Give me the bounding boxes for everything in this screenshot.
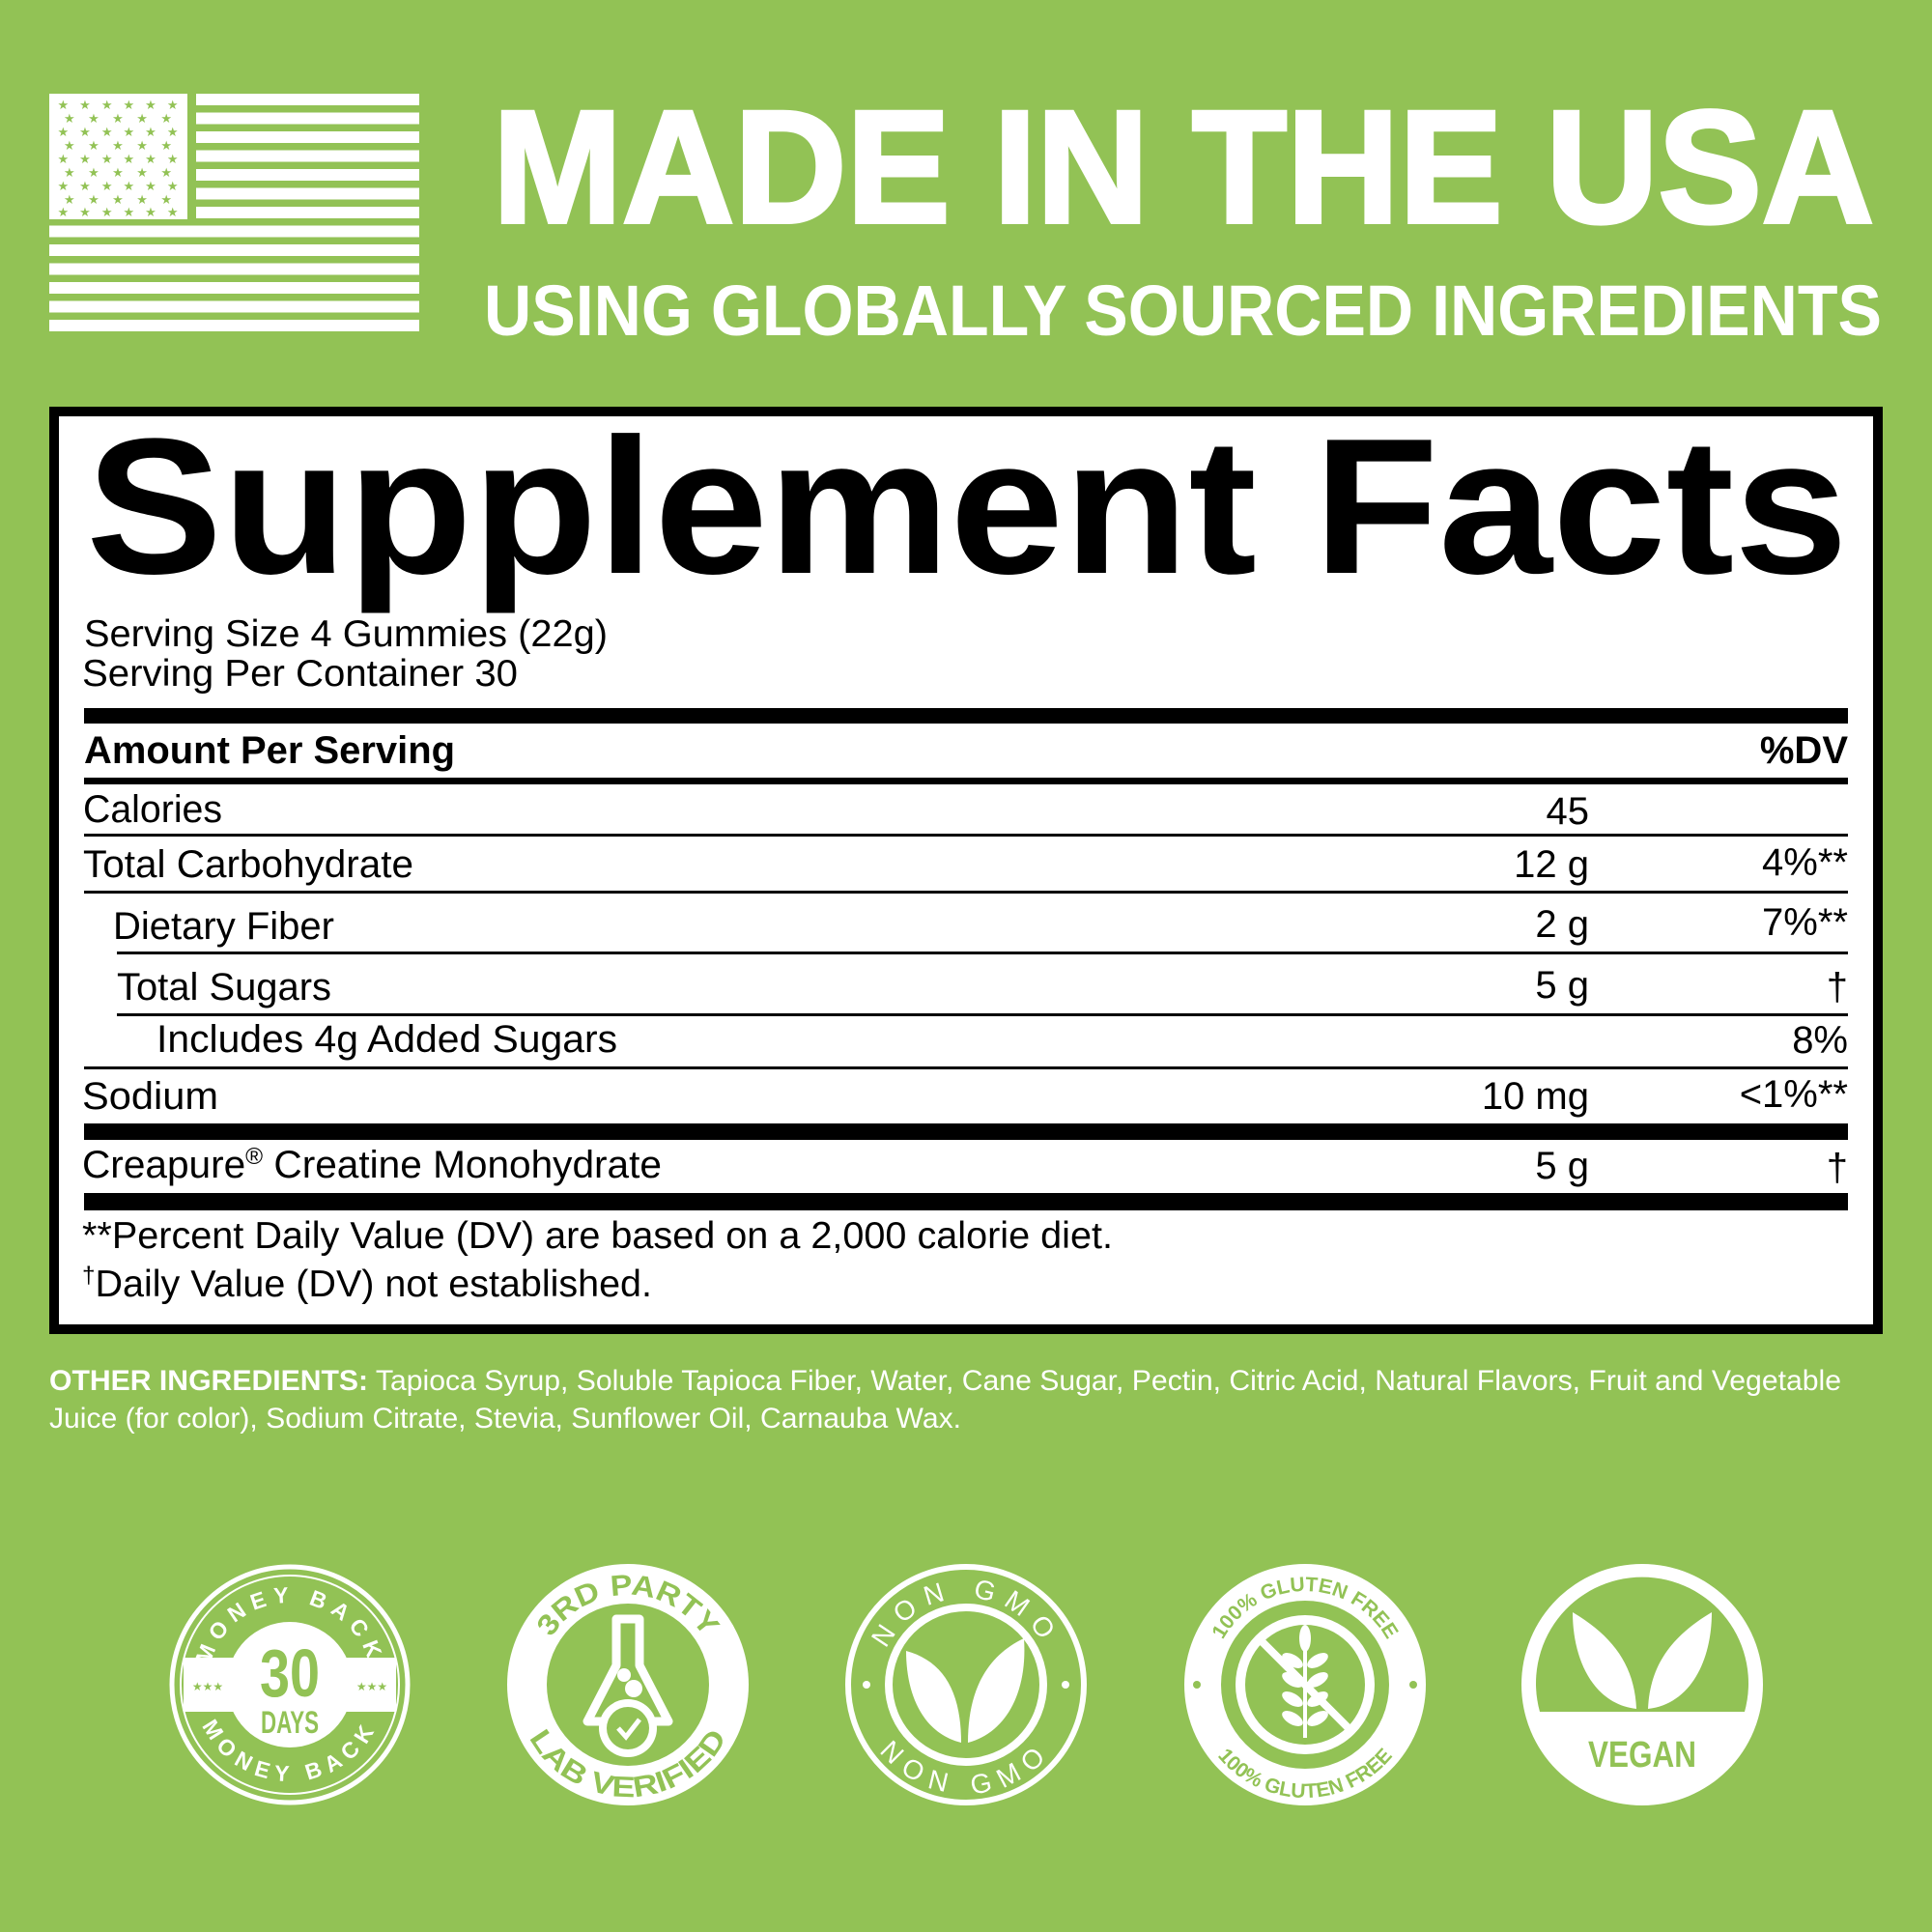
table rows: 45 <box>1546 790 1589 833</box>
table rows: 8% <box>1792 1019 1848 1062</box>
icon: 30 days money back badge: ★★★ <box>356 1680 387 1693</box>
icon: 3rd party lab verified badge: 3RD PARTY <box>538 1575 721 1634</box>
table rows: 2 g <box>1535 903 1589 946</box>
icon: non gmo badge: NON GMO <box>871 1580 1053 1647</box>
icon: 30 days money back badge: MONEY BACK <box>195 1587 383 1658</box>
table rows: 7%** <box>1762 901 1848 944</box>
other ingredients <box>49 1365 1841 1435</box>
icon: 30 days money back badge: DAYS <box>261 1705 319 1740</box>
table rows: Sodium <box>82 1075 218 1118</box>
table rows: 4%** <box>1762 841 1848 884</box>
icon: 30 days money back badge: 30 <box>260 1635 320 1711</box>
table rows: Calories <box>83 788 222 831</box>
table rows: Total Carbohydrate <box>83 843 413 886</box>
icon: american flag: ★ ★ ★ ★ ★ ★ <box>58 125 178 139</box>
footnotes: **Percent Daily Value (DV) are based on a 2,000 calorie diet. <box>82 1215 1113 1257</box>
icon: 30 days money back badge: ★★★ <box>192 1680 223 1693</box>
icon: non gmo badge: NON GMO <box>880 1741 1042 1793</box>
panel: supplement facts <box>54 399 1878 1329</box>
footnotes: † <box>82 1263 96 1289</box>
table rows: <1%** <box>1740 1073 1848 1116</box>
footnotes <box>82 1215 1113 1305</box>
table rows: 5 g <box>1535 964 1589 1007</box>
table rows: Dietary Fiber <box>113 905 334 948</box>
icon: american flag: ★ ★ ★ ★ ★ ★ <box>58 179 178 193</box>
icon: 3rd party lab verified badge <box>507 1564 749 1805</box>
icon: 3rd party lab verified badge: LAB VERIFIED <box>529 1729 723 1797</box>
icon: 30 days money back badge: MONEY BACK <box>203 1719 375 1781</box>
icon: non gmo badge <box>845 1564 1087 1805</box>
icon: gluten free badge <box>1184 1564 1426 1805</box>
table rows: Creatine Monohydrate <box>263 1144 662 1186</box>
other ingredients: Juice (for color), Sodium Citrate, Stevia, Sunflower Oil, Carnauba Wax. <box>49 1403 961 1435</box>
icon: american flag: ★ ★ ★ ★ ★ ★ <box>58 152 178 166</box>
icon: american flag: ★ ★ ★ ★ ★ <box>64 111 172 126</box>
other ingredients: OTHER INGREDIENTS: Tapioca Syrup, Soluble Tapioca Fiber, Water, Cane Sugar, Pectin, Citric Acid, Natural Flavors, Fruit and Vegetable <box>49 1365 1841 1397</box>
icon: american flag: ★ ★ ★ ★ ★ <box>64 165 172 180</box>
icon: vegan badge <box>1521 1564 1763 1805</box>
serving info <box>82 613 608 695</box>
icon: american flag: ★ ★ ★ ★ ★ <box>64 138 172 153</box>
heading: supplement facts: Supplement Facts <box>86 399 1848 614</box>
table rows: Amount Per Serving <box>84 729 455 772</box>
icon: american flag <box>49 94 419 331</box>
icon: american flag: ★ ★ ★ ★ ★ ★ <box>58 98 178 112</box>
icon: american flag: ★ ★ ★ ★ ★ <box>64 192 172 207</box>
table rows: † <box>1827 1147 1848 1189</box>
table rows: Includes 4g Added Sugars <box>156 1018 617 1061</box>
serving info: Serving Per Container 30 <box>82 653 518 695</box>
footnotes: Daily Value (DV) not established. <box>96 1264 652 1305</box>
table rows: 5 g <box>1535 1145 1589 1187</box>
serving info: Serving Size 4 Gummies (22g) <box>84 613 608 655</box>
icon: vegan badge: VEGAN <box>1588 1735 1696 1776</box>
title: MADE IN THE USA <box>493 78 1874 257</box>
table rows: † <box>1827 966 1848 1009</box>
table rows: %DV <box>1760 729 1848 772</box>
icon: gluten free badge: 100% GLUTEN FREE <box>1218 1747 1393 1798</box>
table rows: 10 mg <box>1482 1075 1589 1118</box>
table rows: Total Sugars <box>117 966 331 1009</box>
table rows: 12 g <box>1514 843 1589 886</box>
icon: american flag: ★ ★ ★ ★ ★ ★ <box>58 205 178 219</box>
table rows <box>82 729 1848 1189</box>
table rows: ® <box>245 1144 263 1170</box>
table rows: Creapure <box>82 1144 243 1186</box>
icon: 30 days money back badge <box>170 1565 410 1804</box>
icon: gluten free badge: 100% GLUTEN FREE <box>1213 1577 1399 1639</box>
